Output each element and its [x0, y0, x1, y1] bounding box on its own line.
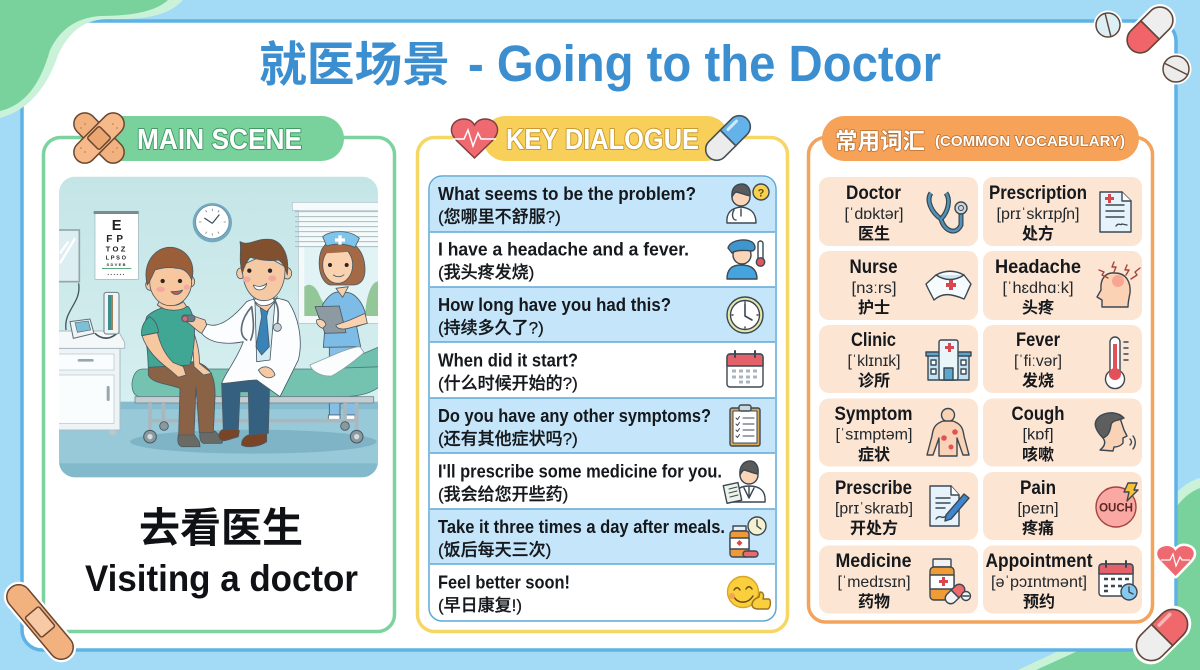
eye chart — [95, 212, 138, 279]
vocab card: fever: Fever — [1016, 330, 1061, 351]
vocab card: pain: Pain — [1020, 478, 1056, 499]
vocab card: appointment — [983, 546, 1142, 614]
cabinet — [53, 348, 120, 430]
icon: heart with pulse — [451, 119, 498, 158]
heading: main scene — [100, 116, 344, 161]
heading: common vocabulary — [822, 116, 1139, 161]
vocab card: doctor: Doctor — [846, 183, 902, 204]
vocab card: clinic: 诊所 — [858, 371, 890, 390]
caption: visiting a doctor: Visiting a doctor — [85, 558, 358, 599]
vocab card: prescription: 处方 — [1022, 224, 1054, 243]
illustration: doctor examining patient in clinic: •••••• — [107, 271, 126, 276]
vocab card: doctor: 医生 — [858, 225, 890, 243]
decoration: tablet right — [1160, 54, 1192, 84]
vocab card: cough — [983, 398, 1142, 466]
dialogue row 8 — [438, 572, 770, 615]
vocab card: fever: 发烧 — [1022, 371, 1054, 390]
vocab card: clinic: Clinic — [851, 330, 896, 351]
vocab card: prescribe: [prɪˈskraɪb] — [835, 500, 913, 518]
vocab card: cough: Cough — [1012, 404, 1064, 425]
icon: writing prescription — [930, 486, 969, 526]
dialogue row 5: (还有其他症状吗?) — [438, 430, 578, 448]
vocab card: medicine: Medicine — [836, 551, 912, 572]
icon: stethoscope — [929, 193, 967, 231]
vocab card: fever — [983, 325, 1142, 393]
decorative green blob bottom right — [1018, 478, 1200, 670]
window — [298, 209, 380, 323]
title — [259, 35, 941, 92]
title: - Going to the Doctor — [468, 35, 941, 92]
caption: visiting a doctor: 去看医生 — [139, 505, 303, 551]
dialogue table — [429, 176, 776, 621]
decoration: capsule top right — [1117, 0, 1183, 63]
heading: common vocabulary: (COMMON VOCABULARY) — [935, 133, 1125, 150]
heading: main scene: MAIN SCENE — [137, 124, 302, 156]
dialogue row 6 — [438, 461, 765, 504]
dialogue row 4 — [438, 350, 763, 393]
wall clock — [193, 203, 232, 242]
caption: visiting a doctor — [85, 505, 358, 599]
icon: ouch circle — [1096, 483, 1138, 527]
dialogue row 7: (饭后每天三次) — [438, 540, 551, 560]
dialogue row 8: (早日康复!) — [438, 595, 522, 615]
vocab card: medicine: [ˈmedɪsɪn] — [838, 574, 910, 591]
illustration: doctor examining patient in clinic: FP — [106, 234, 127, 245]
dialogue row 2 — [438, 240, 765, 282]
dialogue row 5: Do you have any other symptoms? — [438, 406, 711, 426]
icon: medicine bottle and pill — [930, 559, 970, 606]
heading: common vocabulary: 常用词汇 — [835, 129, 925, 154]
vocab card: symptom — [819, 398, 978, 466]
dialogue row 2: (我头疼发烧) — [438, 263, 534, 282]
title: 就医场景 — [259, 39, 450, 92]
dialogue row 8: Feel better soon! — [438, 572, 570, 592]
icon: ouch circle: OUCH — [1099, 502, 1133, 514]
vocab card: prescription: [prɪˈskrɪpʃn] — [996, 206, 1080, 223]
icon: blue capsule — [701, 111, 755, 165]
icon: crossed bandages — [69, 108, 129, 168]
vocab card: clinic: [ˈklɪnɪk] — [848, 353, 900, 370]
heading: key dialogue: KEY DIALOGUE — [506, 124, 699, 156]
illustration: doctor examining patient in clinic — [53, 177, 383, 477]
bed frame — [135, 397, 374, 403]
icon: coughing man — [1095, 413, 1135, 451]
dialogue row 1: (您哪里不舒服?) — [438, 208, 561, 226]
dialogue row 1 — [438, 184, 769, 226]
vocab card: doctor: [ˈdɒktər] — [844, 206, 904, 223]
vocab card: headache: Headache — [995, 257, 1081, 278]
vocab card: fever: [ˈfiːvər] — [1014, 353, 1062, 370]
vocab card: medicine — [819, 546, 978, 614]
decoration: tablet top — [1094, 10, 1122, 40]
nurse — [315, 232, 367, 422]
dialogue row 4: When did it start? — [438, 350, 578, 370]
vocab card: clinic — [819, 325, 978, 393]
dialogue row 7: Take it three times a day after meals. — [438, 517, 725, 537]
vocab card: headache — [983, 251, 1142, 320]
dialogue row 6: (我会给您开些药) — [438, 485, 568, 504]
vocab card: headache: 头疼 — [1022, 298, 1054, 317]
vocab card: nurse: 护士 — [858, 299, 890, 317]
dialogue row 5 — [438, 405, 760, 448]
vocab card: cough: [kɒf] — [1022, 426, 1054, 444]
vocab card: pain — [983, 472, 1142, 540]
doctor — [182, 239, 300, 447]
vocab card: doctor — [819, 177, 978, 246]
dialogue row 2: I have a headache and a fever. — [438, 240, 689, 260]
dialogue row 3: How long have you had this? — [438, 295, 671, 315]
dialogue row 7 — [438, 517, 766, 560]
icon: thermometer — [1106, 337, 1128, 389]
vocab card: prescribe — [819, 472, 978, 540]
vocab card: headache: [ˈhɛdhɑːk] — [1002, 280, 1074, 297]
icon: nurse cap — [926, 271, 971, 300]
vocab card: prescribe: 开处方 — [850, 518, 898, 538]
icon: clinic building — [926, 340, 971, 380]
dialogue row 1: What seems to be the problem? — [438, 184, 696, 204]
vocab card: prescription — [983, 177, 1142, 246]
panel: main scene — [44, 108, 394, 632]
dialogue row 4: (什么时候开始的?) — [438, 374, 578, 393]
vocab card: appointment: 预约 — [1023, 593, 1055, 611]
illustration: doctor examining patient in clinic: LPSO — [106, 255, 128, 261]
dialogue row 3: (持续多久了?) — [438, 318, 544, 338]
dialogue row 6: I'll prescribe some medicine for you. — [438, 462, 722, 482]
decorative green blob top left — [0, 0, 183, 118]
vocab card: symptom: Symptom — [834, 404, 912, 425]
vocab card: pain: [peɪn] — [1018, 500, 1058, 518]
vocab card: pain: 疼痛 — [1022, 518, 1054, 538]
vocab card: appointment: [əˈpɔɪntmənt] — [991, 574, 1087, 591]
vocab card: symptom: 症状 — [858, 446, 890, 464]
icon: headache head — [1097, 262, 1140, 307]
blood pressure monitor — [70, 319, 94, 338]
bed — [346, 347, 378, 368]
vocab card: nurse — [819, 251, 978, 320]
decoration: bandage bottom left — [0, 576, 82, 668]
vocab card: prescribe: Prescribe — [835, 478, 912, 499]
decoration: heart bottom right — [1157, 546, 1194, 576]
vocab card: nurse: [nɜːrs] — [852, 280, 896, 297]
patient — [141, 247, 223, 447]
panel: key dialogue — [418, 111, 788, 632]
icon: prescription paper — [1100, 192, 1131, 232]
heading: key dialogue — [483, 116, 729, 161]
illustration: doctor examining patient in clinic: SDVEB — [106, 262, 127, 267]
wall monitor — [59, 229, 80, 282]
illustration: doctor examining patient in clinic: E — [112, 218, 122, 234]
illustration: doctor examining patient in clinic: TOZ — [106, 245, 128, 254]
vocab card: appointment: Appointment — [986, 551, 1093, 572]
dialogue row 1: ? — [758, 188, 765, 200]
vocab card: cough: 咳嗽 — [1022, 445, 1054, 464]
vocab card: prescription: Prescription — [989, 183, 1087, 204]
vocab card: medicine: 药物 — [858, 593, 890, 611]
icon: body with rash — [927, 408, 969, 456]
dialogue row 3 — [438, 295, 763, 338]
vocab card: symptom: [ˈsɪmptəm] — [836, 426, 912, 444]
panel: common vocabulary — [808, 116, 1152, 622]
decoration: capsule bottom right — [1125, 598, 1199, 670]
icon: appointment calendar — [1099, 561, 1137, 600]
vocab card: nurse: Nurse — [850, 257, 898, 278]
